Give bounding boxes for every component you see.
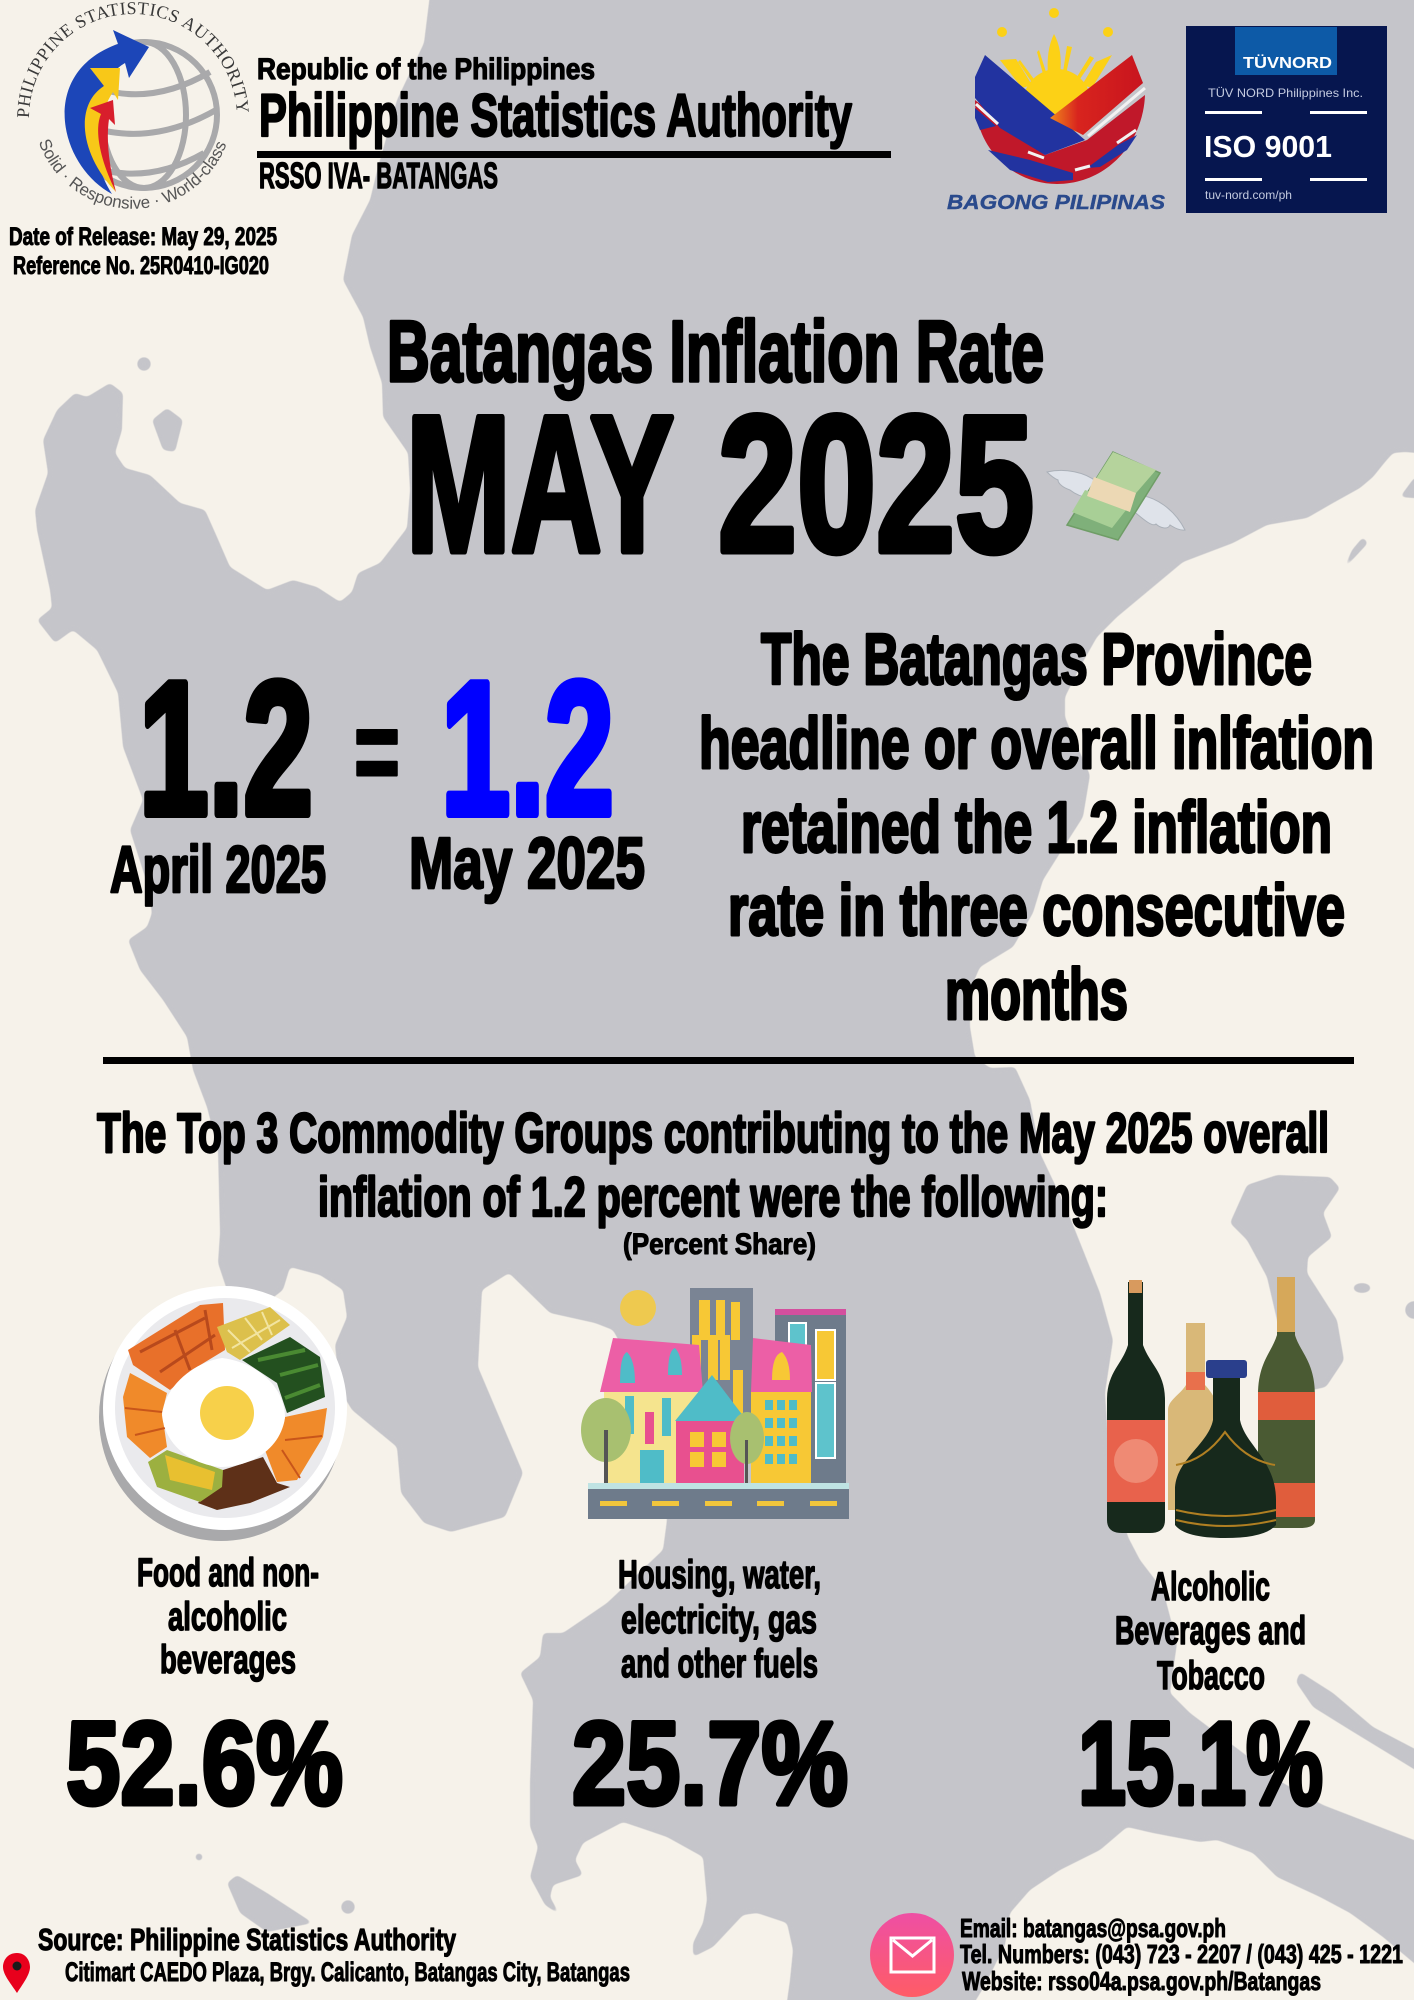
vegetables	[148, 1450, 223, 1502]
category 2: housing: electricity, gas	[621, 1598, 817, 1642]
blue and red bands	[975, 55, 1085, 155]
ISO 9001 certification badge: TÜVNORD	[1243, 53, 1332, 72]
month and year	[406, 376, 1034, 593]
release date and reference number: Date of Release: May 29, 2025	[9, 223, 277, 251]
icon: email circle	[870, 1913, 954, 1997]
category 3: alcoholic beverages: Tobacco	[1157, 1654, 1265, 1698]
equals sign: =	[354, 686, 400, 818]
category 1: food: Food and non-	[137, 1551, 319, 1595]
icon: location pin	[3, 1953, 30, 1993]
release date and reference number: Reference No. 25R0410-IG020	[13, 252, 269, 280]
header: agency name block	[257, 53, 891, 196]
ISO 9001 certification badge: TÜV NORD Philippines Inc.	[1208, 86, 1363, 100]
contact details	[960, 1913, 1403, 1996]
icon: houses and buildings	[581, 1288, 849, 1519]
logo arrows	[65, 30, 149, 194]
source line and address: Source: Philippine Statistics Authority	[38, 1922, 457, 1957]
yolk	[200, 1386, 254, 1440]
contact details: Email: batangas@psa.gov.ph	[960, 1913, 1226, 1943]
alcohol share: 15.1%	[1078, 1698, 1323, 1830]
white weave gaps	[976, 88, 1145, 170]
category 2: housing: and other fuels	[621, 1642, 818, 1686]
carrots	[128, 1303, 225, 1390]
yellow facades	[604, 1392, 704, 1485]
category 3: alcoholic beverages: Beverages and	[1115, 1609, 1306, 1653]
April value: 1.2	[139, 643, 313, 855]
comparison: April vs May rate	[110, 643, 645, 906]
ISO 9001 certification badge	[1186, 26, 1387, 213]
category 3: alcoholic beverages	[1078, 1565, 1323, 1830]
April label: April 2025	[110, 832, 326, 906]
center pink house	[676, 1420, 744, 1485]
ISO 9001 certification badge: ISO 9001	[1204, 129, 1332, 164]
category 2: housing: Housing, water,	[618, 1553, 821, 1597]
right sweet potato	[265, 1408, 327, 1482]
percent share note: (Percent Share)	[623, 1228, 816, 1261]
logo circular text: PHILIPPINE STATISTICS AUTHORITY	[17, 2, 249, 118]
sun	[620, 1290, 656, 1326]
icon: bibimbap plate	[99, 1286, 347, 1541]
TUV NORD tab	[1235, 27, 1337, 75]
source line and address	[38, 1922, 630, 1987]
category 1: food: alcoholic	[168, 1595, 287, 1639]
logo wordmark: BAGONG PILIPINAS	[947, 192, 1166, 214]
ISO 9001 certification badge: tuv-nord.com/ph	[1205, 188, 1292, 202]
bean sprouts	[217, 1307, 290, 1360]
spinach	[242, 1337, 325, 1413]
dark red-label bottle	[1107, 1282, 1165, 1533]
road	[588, 1483, 849, 1489]
republic line: Republic of the Philippines	[257, 53, 595, 86]
category 3: alcoholic beverages: Alcoholic	[1151, 1565, 1270, 1609]
commodity section heading: inflation of 1.2 percent were the following:	[318, 1165, 1108, 1228]
right tower	[775, 1313, 846, 1485]
header: PSA logo	[17, 2, 249, 209]
commodity section heading	[97, 1101, 1329, 1261]
regional office: RSSO IVA- BATANGAS	[259, 155, 498, 196]
logo globe	[71, 42, 217, 188]
pink roofs	[600, 1338, 703, 1392]
fried egg	[162, 1358, 285, 1467]
month and year: MAY	[406, 376, 674, 593]
logo motto: Solid · Responsive · World-class	[40, 140, 226, 209]
month and year: 2025	[718, 376, 1034, 593]
trees	[581, 1398, 631, 1462]
release date and reference number	[9, 223, 277, 280]
icon: bottles	[1107, 1277, 1315, 1538]
statement paragraph	[699, 620, 1374, 1035]
left sweet potato	[123, 1373, 167, 1458]
category 2: housing	[572, 1553, 848, 1830]
title	[387, 304, 1044, 593]
front round bottle	[1175, 1377, 1276, 1538]
May label: May 2025	[409, 824, 645, 904]
title line: Batangas Inflation Rate	[387, 304, 1044, 400]
header rule	[257, 151, 891, 158]
icon: money with wings	[1047, 452, 1185, 540]
housing share: 25.7%	[572, 1698, 848, 1830]
sun and stars	[997, 8, 1113, 137]
statement paragraph: months	[945, 955, 1128, 1035]
bowl underlay	[975, 95, 1145, 184]
meat	[198, 1457, 290, 1510]
tan bottle	[1168, 1323, 1216, 1510]
Bagong Pilipinas logo	[947, 8, 1166, 214]
source line and address: Citimart CAEDO Plaza, Brgy. Calicanto, Batangas City, Batangas	[65, 1957, 630, 1987]
gray tower	[690, 1288, 753, 1438]
category 1: food	[66, 1551, 343, 1830]
green bottle	[1258, 1277, 1315, 1528]
category 1: food: beverages	[160, 1638, 296, 1682]
May value: 1.2	[441, 643, 614, 855]
food share: 52.6%	[66, 1698, 343, 1830]
agency name: Philippine Statistics Authority	[259, 82, 852, 149]
